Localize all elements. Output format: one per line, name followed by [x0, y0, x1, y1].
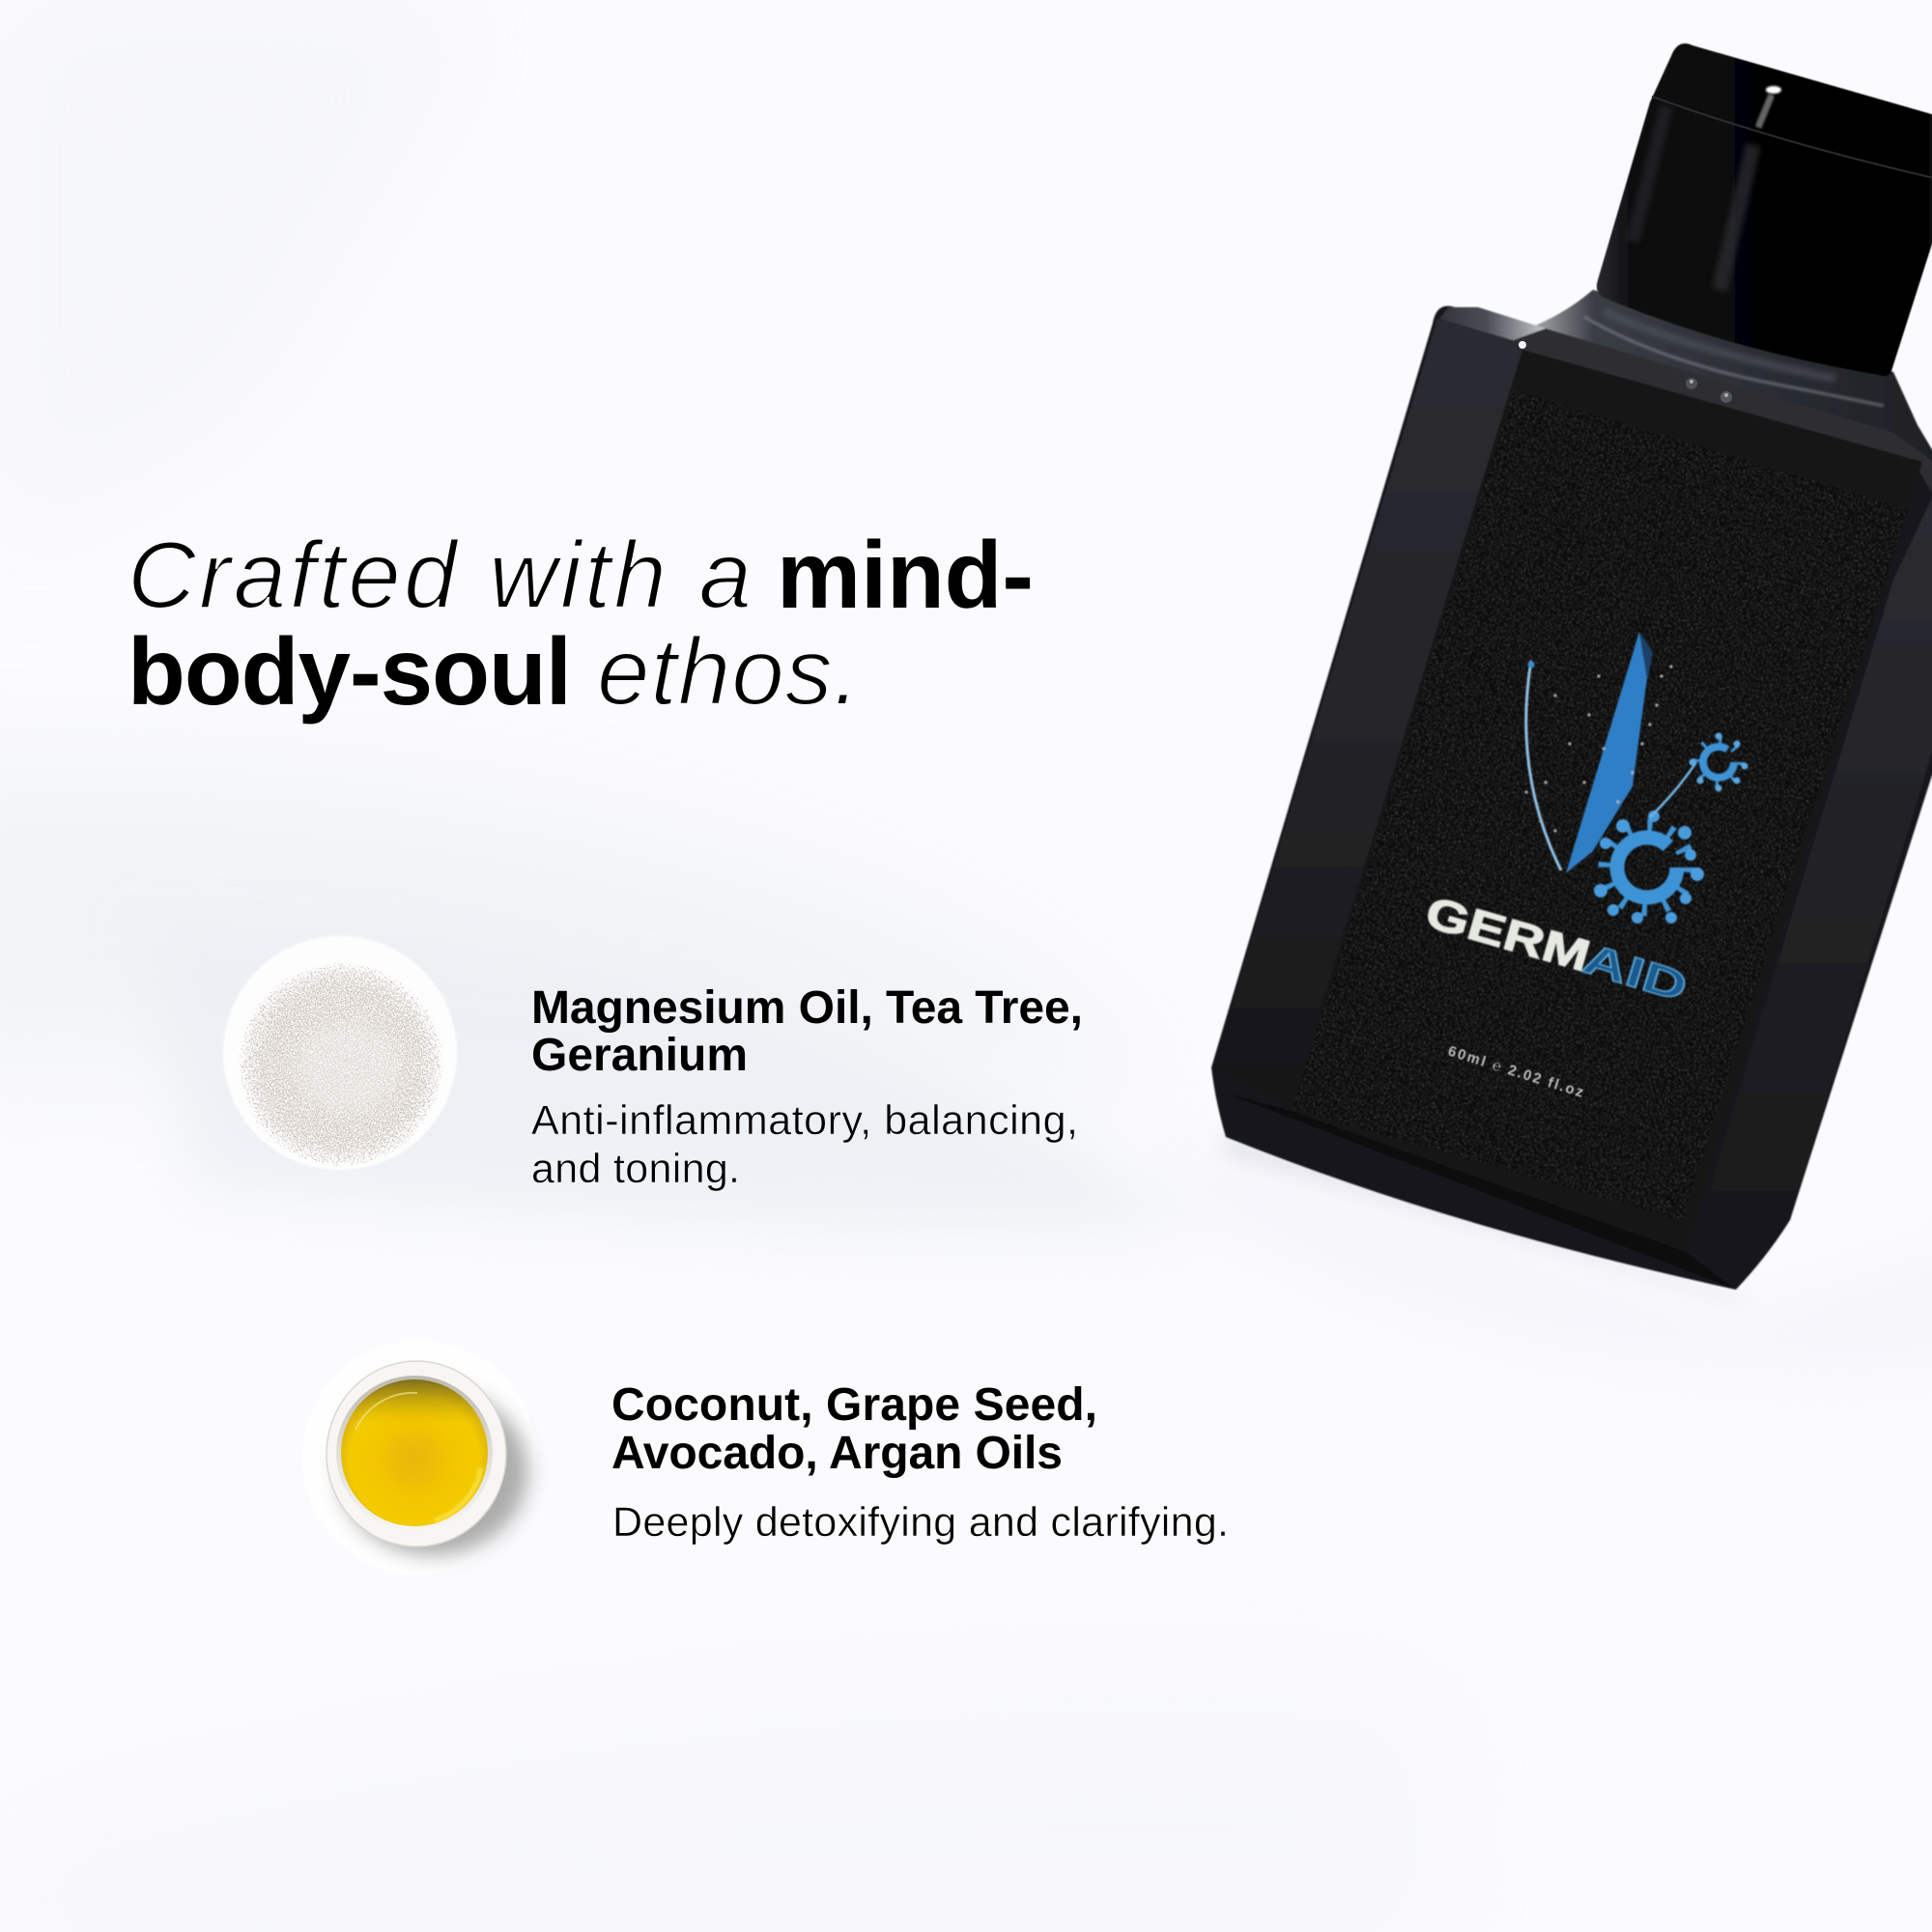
text block: magnesium oil, tea tree, geranium [531, 982, 1083, 1192]
brand name: germaid [1420, 888, 1693, 1010]
title: crafted with a mind-body-soul ethos: Crafted with a [128, 522, 752, 628]
icon: bowl of yellow oil on white circle [302, 1341, 536, 1575]
bottle neck [1536, 289, 1932, 459]
title: crafted with a mind-body-soul ethos: ethos. [597, 618, 860, 724]
highlight and droplets [1519, 341, 1732, 403]
bottle body [1211, 306, 1932, 1290]
title: crafted with a mind-body-soul ethos: mind- [777, 522, 1034, 628]
bottle shadow [1224, 1138, 1615, 1263]
product: germaid bottle [1211, 43, 1932, 1306]
title: crafted with a mind-body-soul ethos [128, 522, 1034, 724]
icon: salt pile on white circle [223, 936, 457, 1170]
text block: magnesium oil, tea tree, geranium: and toning. [531, 1146, 740, 1192]
text block: magnesium oil, tea tree, geranium: Magnesium Oil, Tea Tree, [531, 982, 1083, 1034]
text block: magnesium oil, tea tree, geranium: Anti-inflammatory, balancing, [531, 1097, 1078, 1144]
brand name: germaid: GERM [1420, 888, 1595, 981]
large virus [1594, 810, 1704, 923]
label [1293, 390, 1908, 1220]
small virus [1689, 732, 1748, 792]
front face [1291, 350, 1922, 1252]
sparkle specks [1524, 665, 1673, 833]
cap [1597, 43, 1932, 376]
left side panel [1275, 319, 1522, 867]
cap ring line [1652, 97, 1932, 180]
text block: coconut, grape seed, avocado, argan oils: Avocado, Argan Oils [611, 1428, 1063, 1479]
text block: coconut, grape seed, avocado, argan oils: Deeply detoxifying and clarifying. [612, 1499, 1229, 1546]
arc [1526, 661, 1561, 870]
volume text: 60ml ℮ 2.02 fl.oz [1446, 1043, 1585, 1101]
cap highlight [1633, 86, 1781, 290]
brand name: germaid: AID [1577, 934, 1693, 1010]
right side panel [1779, 498, 1932, 1220]
blade [1566, 632, 1647, 873]
logo mark: blade, arc and virus icons [1524, 632, 1748, 923]
connector stem [1650, 762, 1696, 817]
top shoulder strip [1439, 307, 1546, 343]
text block: magnesium oil, tea tree, geranium: Geranium [531, 1030, 748, 1081]
text block: coconut, grape seed, avocado, argan oils [611, 1379, 1229, 1546]
title: crafted with a mind-body-soul ethos: body-soul [128, 618, 572, 724]
text block: coconut, grape seed, avocado, argan oils: Coconut, Grape Seed, [611, 1379, 1097, 1431]
bottom band [1222, 1092, 1736, 1290]
